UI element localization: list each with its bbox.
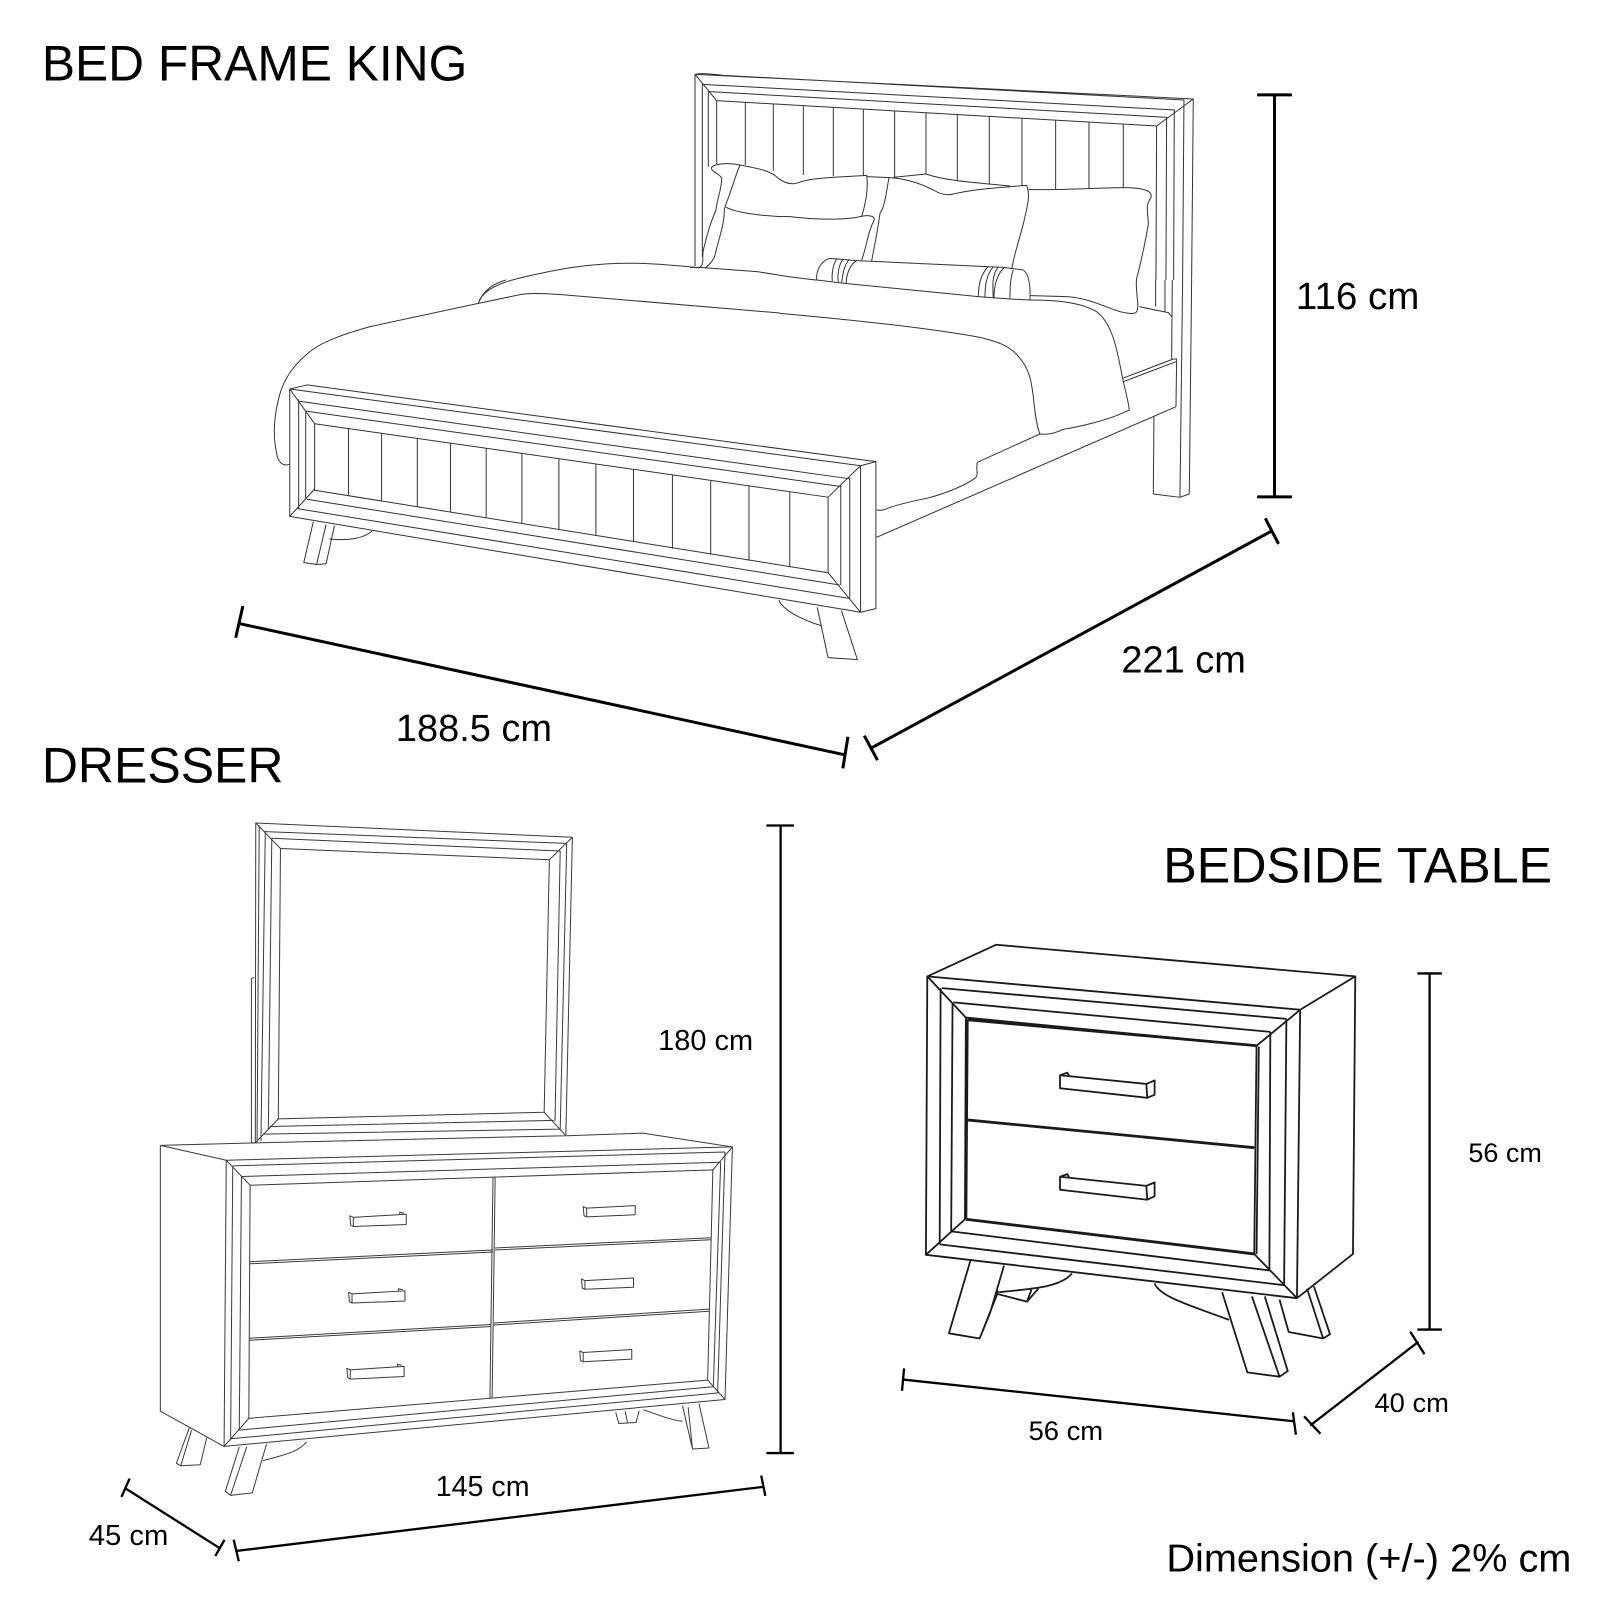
heading: bed frame king: BED FRAME KING (42, 36, 467, 92)
label: 56 cm height: 56 cm (1468, 1138, 1542, 1168)
label: 116 cm: 116 cm (1296, 276, 1419, 318)
cabinet body (926, 945, 1355, 1298)
headboard (695, 74, 1193, 280)
dimension: bedside depth (1304, 1332, 1424, 1434)
pillows and bolster (690, 164, 1151, 314)
heading: dresser: DRESSER (42, 738, 283, 794)
label: 40 cm: 40 cm (1374, 1388, 1449, 1418)
footboard (290, 385, 876, 660)
illustration: king bed frame (274, 74, 1193, 660)
dimension: dresser height (766, 826, 794, 1453)
label: 56 cm width: 56 cm (1029, 1416, 1103, 1446)
dresser body (160, 1133, 732, 1446)
dimension: dresser width (234, 1475, 765, 1561)
heading: bedside table: BEDSIDE TABLE (1163, 838, 1552, 894)
dresser legs (176, 1404, 709, 1495)
dimension: bedside height (1417, 973, 1442, 1330)
dimension: bed depth (864, 518, 1279, 760)
dimension: bed height (1257, 95, 1292, 497)
table legs (949, 1260, 1330, 1377)
dimension: bed width (236, 606, 848, 768)
label: 188.5 cm: 188.5 cm (396, 708, 552, 750)
mirror (251, 823, 572, 1143)
dimension: dresser depth (121, 1479, 224, 1556)
drawer handles (1060, 1073, 1155, 1200)
bed rail, duvet right fold and right post (780, 280, 1192, 537)
label: 145 cm: 145 cm (436, 1471, 530, 1503)
illustration: bedside table (926, 945, 1355, 1377)
footnote: tolerance: Dimension (+/-) 2% cm (1166, 1536, 1571, 1580)
label: 180 cm: 180 cm (658, 1025, 753, 1057)
illustration: dresser with mirror (160, 823, 732, 1495)
dimension: bedside width (902, 1368, 1296, 1435)
drawers (966, 1020, 1259, 1254)
drawers (249, 1177, 711, 1398)
drawer handles (347, 1206, 635, 1379)
label: 221 cm: 221 cm (1121, 639, 1246, 681)
duvet front and left drape (274, 280, 780, 465)
label: 45 cm: 45 cm (89, 1520, 168, 1552)
duvet back fold (479, 263, 699, 301)
